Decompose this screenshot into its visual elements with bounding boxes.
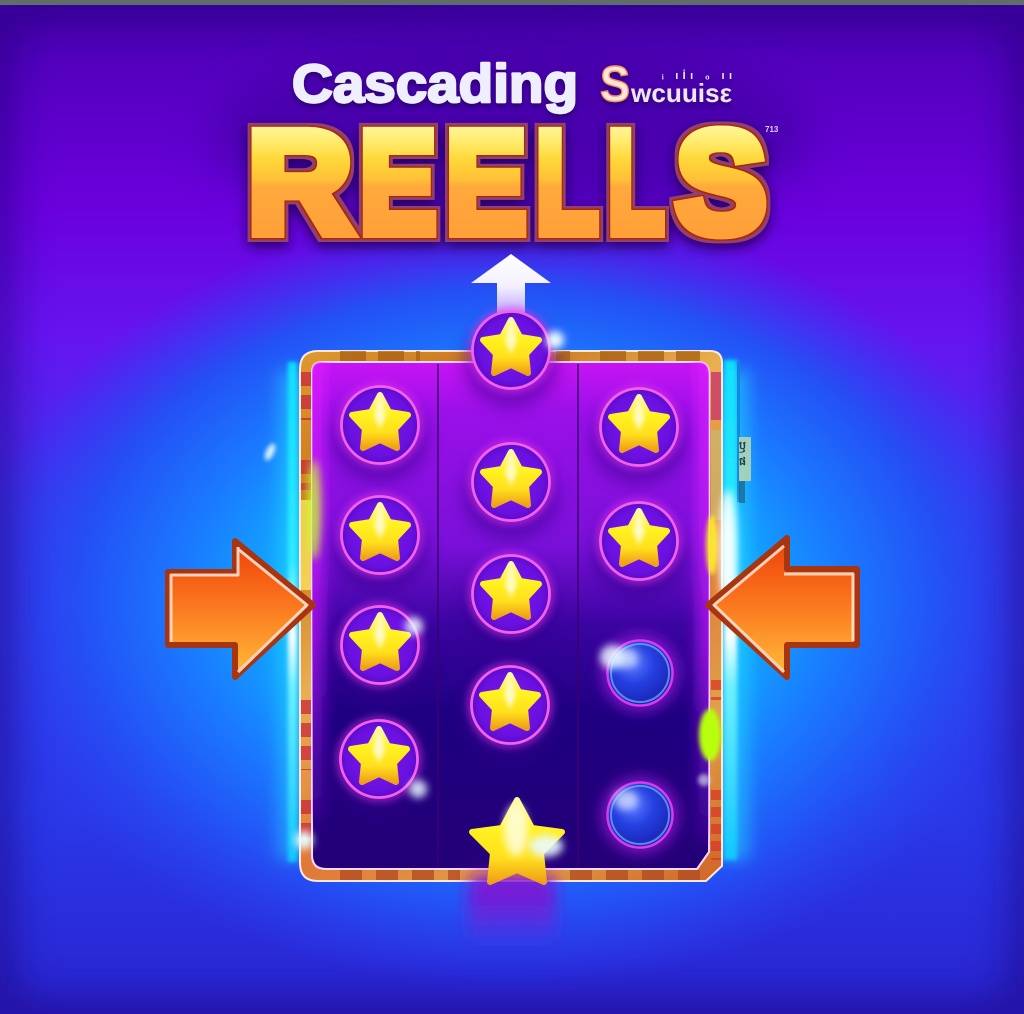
reel 1 symbols [331, 386, 428, 817]
star token [332, 496, 428, 593]
star token [591, 388, 687, 485]
star token [332, 606, 428, 703]
arrow highlights [171, 546, 853, 672]
stray side glyphs [739, 437, 751, 503]
heading: REELLS: E [360, 102, 436, 263]
heading: REELLS [248, 102, 766, 263]
star token [462, 666, 558, 763]
heading: REELLS: S [676, 102, 766, 263]
star highlight [504, 804, 528, 856]
panel: reels frame [300, 350, 737, 881]
star token [331, 720, 427, 817]
reel 3 symbols [591, 388, 687, 852]
inner edge glow [304, 350, 717, 840]
sparkles [263, 331, 710, 857]
star token [591, 502, 687, 599]
subtitle: Cascading: Cascading [292, 54, 578, 114]
stray side glyphs: ផ [739, 456, 746, 468]
title glow [210, 40, 810, 230]
arrow: up [471, 254, 551, 318]
frame border [300, 351, 722, 881]
heading: REELLS: L [608, 102, 664, 263]
star token [332, 386, 428, 483]
star trail [468, 874, 556, 946]
blue orb [603, 636, 677, 710]
star [472, 800, 562, 882]
lime and yellow flares [307, 460, 321, 560]
frame colour tiles [306, 356, 716, 875]
reel dividers [438, 364, 578, 868]
reel background [312, 362, 709, 869]
heading: REELLS: R [248, 102, 352, 263]
subtitle: Cascading: wcuuisε [630, 78, 732, 108]
escaping top star token [463, 311, 559, 408]
subtitle: Cascading: ᵢ ıİı ₀ ıı [662, 69, 732, 82]
star token [463, 443, 559, 540]
arrow: left [168, 541, 313, 677]
subtitle: Cascading [292, 54, 732, 114]
reel 2 symbols [462, 443, 559, 763]
title [210, 40, 810, 263]
star token [463, 555, 559, 652]
heading: REELLS: L [536, 102, 598, 263]
subtitle: Cascading: S [600, 56, 630, 112]
trademark mark: 713 [765, 125, 779, 134]
cyan side light bars [278, 360, 749, 862]
arrow: right [708, 538, 857, 677]
falling star [468, 800, 562, 946]
blue orb [603, 778, 677, 852]
heading: REELLS: E [446, 102, 526, 263]
stray side glyphs: ឫ [739, 440, 746, 453]
